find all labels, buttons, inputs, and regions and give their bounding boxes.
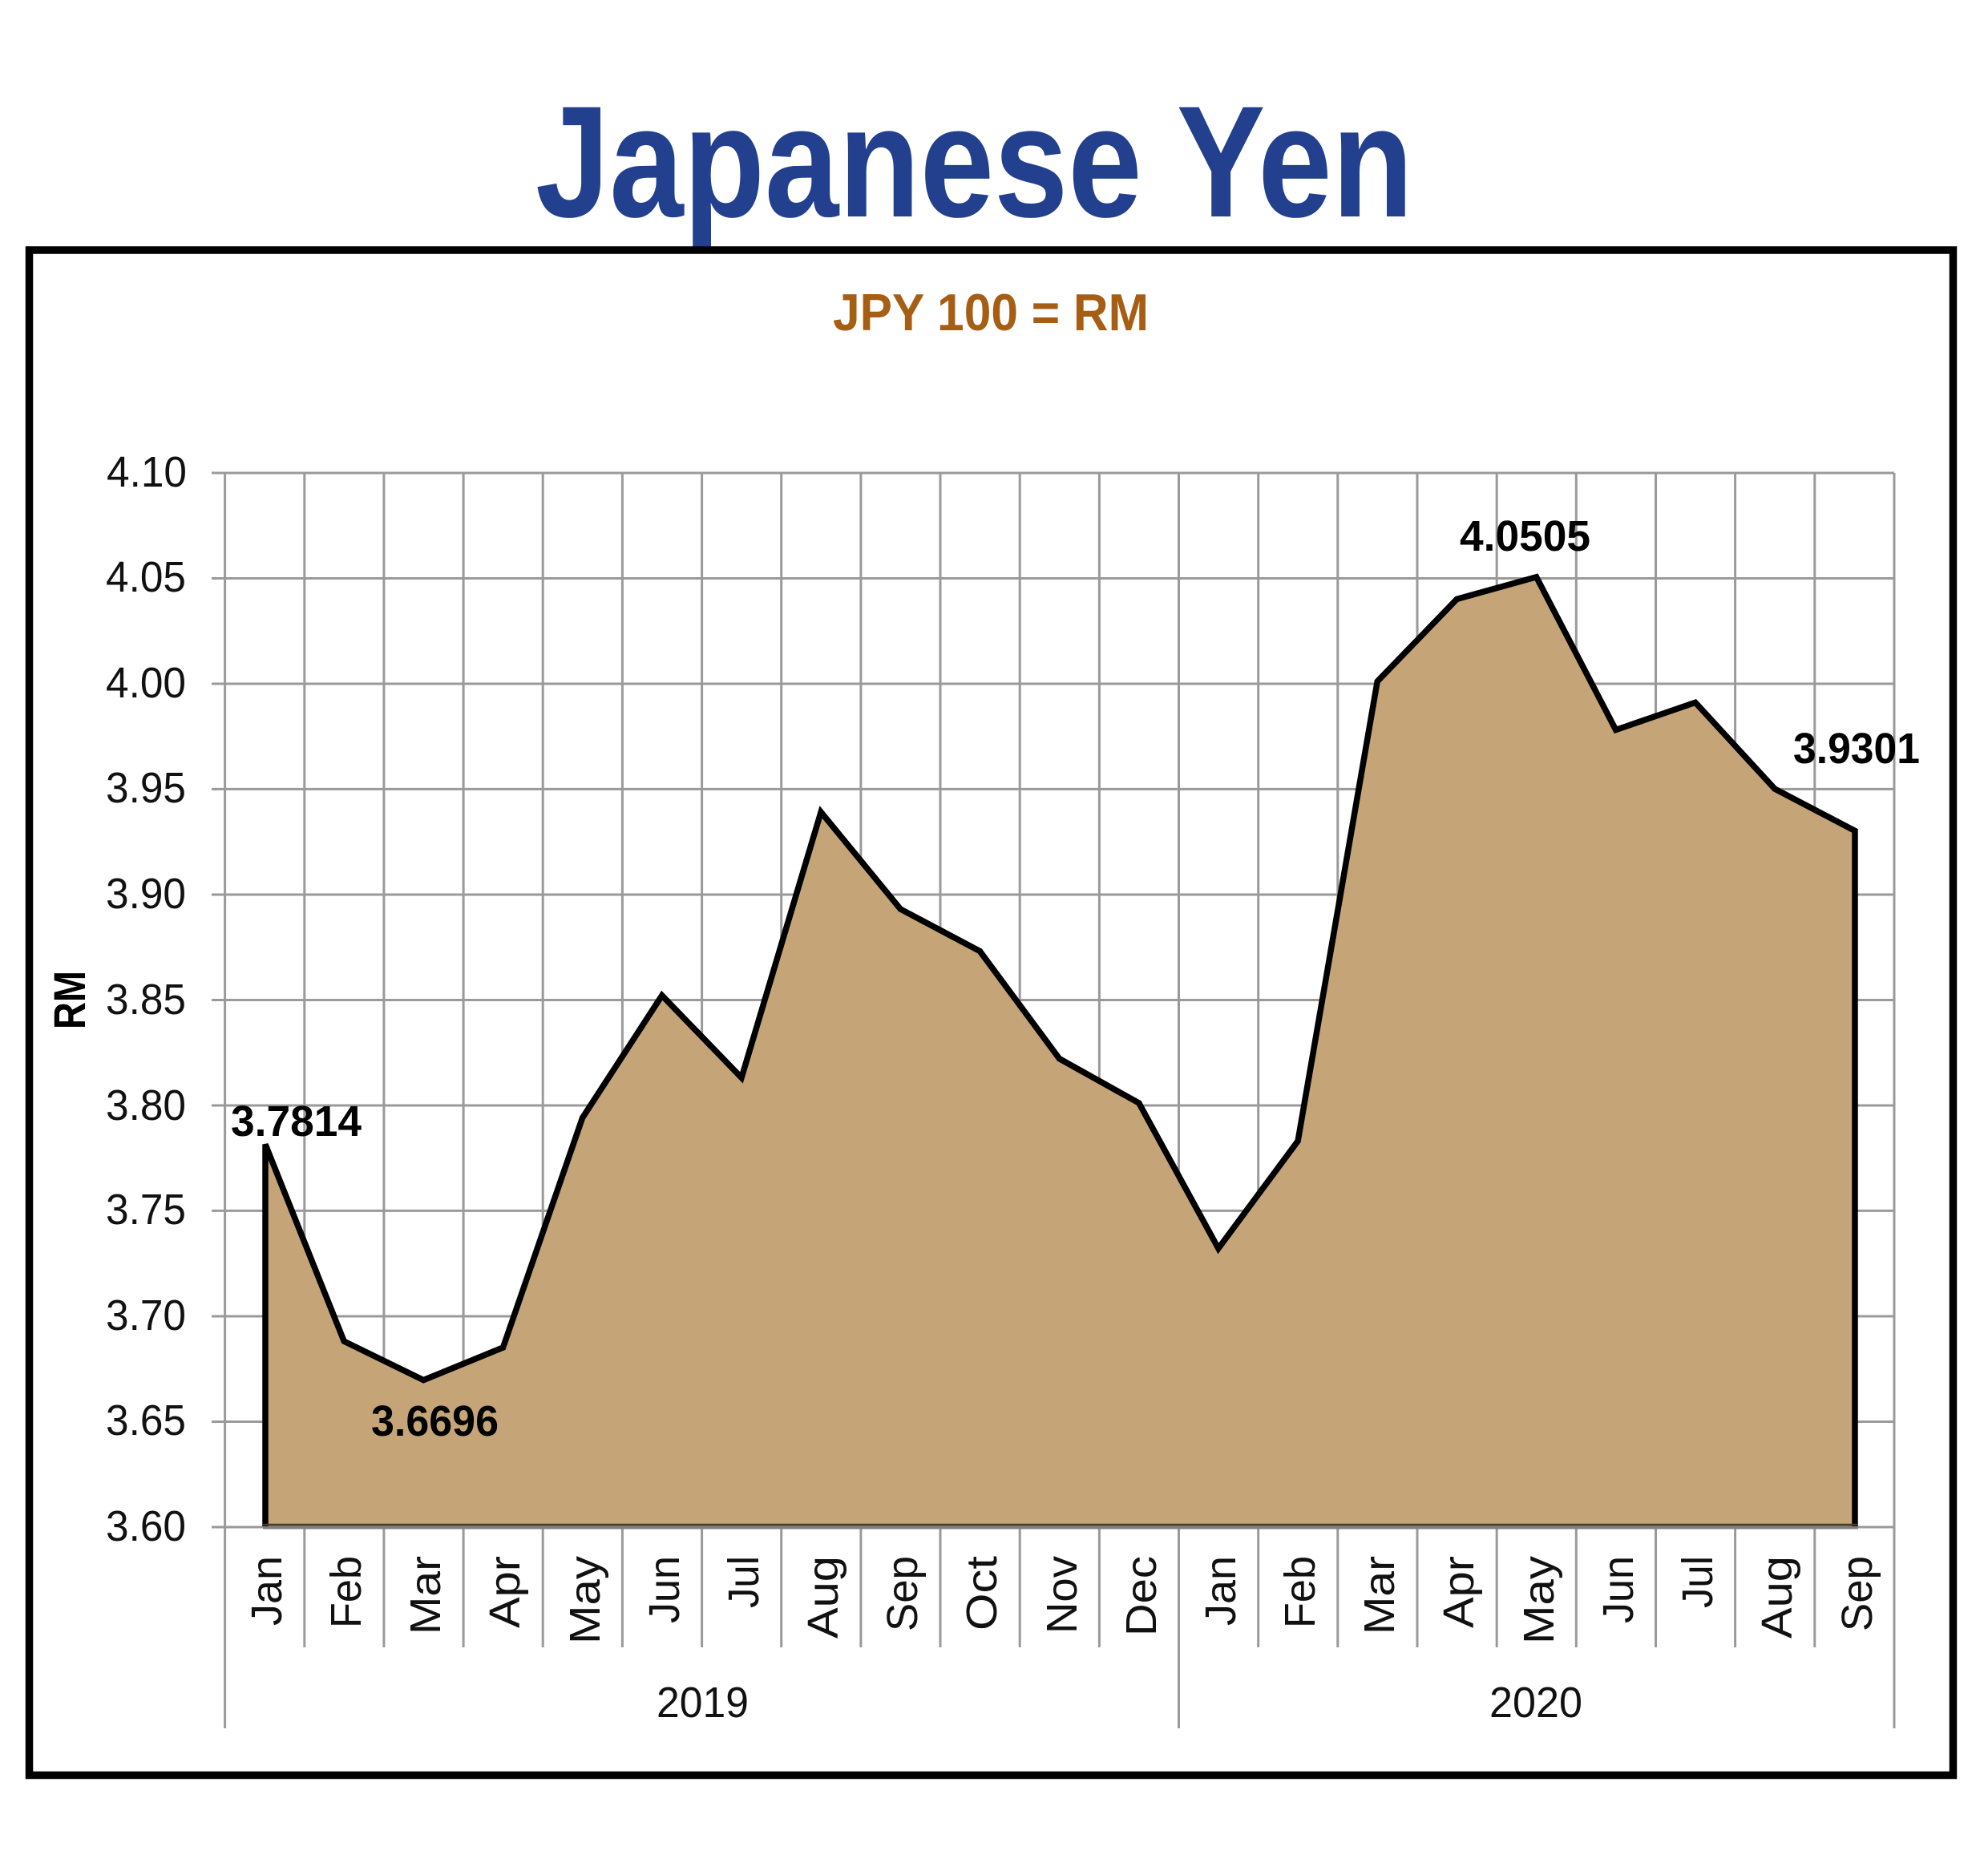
y-axis labels: 3.75: [106, 1186, 186, 1234]
data labels: 3.7814: [231, 1097, 362, 1146]
data labels: 3.6696: [371, 1397, 499, 1445]
month labels: Oct: [958, 1556, 1006, 1631]
month labels: Sep: [879, 1556, 927, 1631]
y-axis labels: 4.05: [106, 553, 186, 601]
y-axis labels: [106, 448, 187, 1550]
month labels: Feb: [1276, 1556, 1324, 1628]
month labels: Jul: [1674, 1556, 1722, 1608]
y-axis labels: 3.80: [106, 1081, 186, 1129]
month labels: May: [561, 1556, 609, 1644]
area chart: [212, 473, 1894, 1728]
month labels: Jun: [640, 1556, 689, 1623]
x-axis band: [263, 1525, 1858, 1529]
subtitle: JPY 100 = RM: [833, 283, 1149, 341]
y-axis labels: 3.95: [106, 764, 186, 812]
baseline edge: [263, 1524, 1858, 1525]
month labels: Jul: [720, 1556, 768, 1608]
y-axis labels: 3.90: [106, 870, 186, 918]
month labels: Nov: [1038, 1556, 1086, 1634]
title: Japanese Yen: [535, 73, 1413, 250]
month labels: Jun: [1594, 1556, 1643, 1623]
month labels: Aug: [1753, 1556, 1801, 1639]
month labels: [243, 1556, 1881, 1644]
month labels: Apr: [481, 1556, 529, 1628]
month labels: Aug: [799, 1556, 847, 1639]
month labels: Dec: [1117, 1556, 1166, 1636]
year labels: 2019: [657, 1679, 749, 1727]
month labels: Feb: [322, 1556, 370, 1628]
y-axis labels: 3.65: [106, 1396, 186, 1445]
y-axis labels: 3.70: [106, 1291, 186, 1340]
month labels: Mar: [402, 1556, 450, 1635]
year labels: [657, 1679, 1582, 1727]
y-axis labels: 3.60: [106, 1502, 186, 1550]
month labels: Jan: [1197, 1556, 1245, 1626]
data labels: 4.0505: [1460, 512, 1590, 560]
area outline: [265, 577, 1855, 1526]
month labels: Mar: [1356, 1556, 1404, 1635]
month labels: May: [1515, 1556, 1563, 1644]
data labels: 3.9301: [1793, 725, 1920, 773]
y-axis labels: 4.00: [106, 659, 186, 707]
month labels: Sep: [1833, 1556, 1881, 1631]
y-axis title: RM: [44, 971, 95, 1029]
y-axis labels: 4.10: [107, 448, 187, 496]
year labels: 2020: [1489, 1679, 1582, 1727]
month labels: Jan: [243, 1556, 291, 1626]
data labels: [231, 512, 1920, 1445]
gridlines: [212, 473, 1894, 1728]
panel: chart frame: [29, 250, 1953, 1775]
y-axis labels: 3.85: [106, 976, 186, 1024]
month labels: Apr: [1435, 1556, 1483, 1628]
area series: [265, 577, 1855, 1525]
